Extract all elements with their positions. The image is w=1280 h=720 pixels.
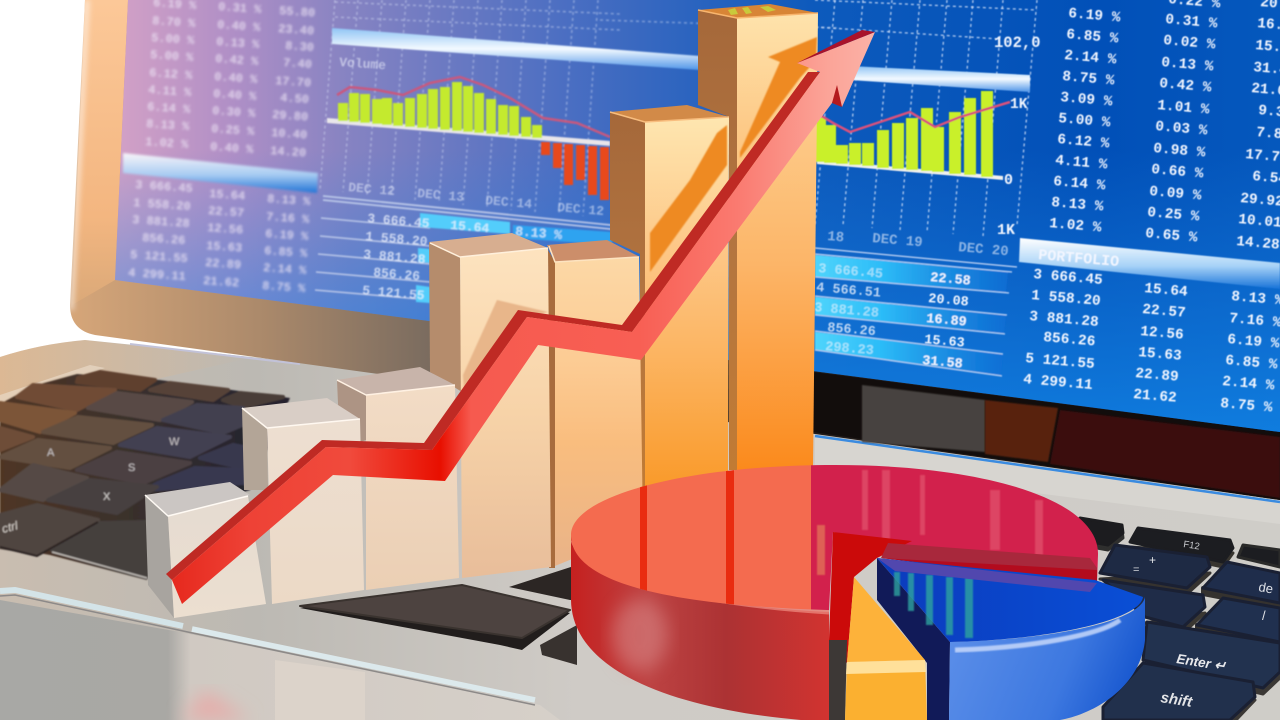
screen: blurred left data tables: 5.00 %	[151, 31, 196, 48]
screen: middle data table: 3 666.45	[818, 262, 883, 283]
screen: blurred left data tables: 4.11 %	[148, 83, 193, 100]
screen: blurred left data tables: 8.70 %	[152, 14, 197, 31]
bar 5	[547, 240, 643, 568]
screen: blurred left data tables	[123, 0, 318, 296]
key F12	[1130, 528, 1233, 567]
screen: right percent table: 5.00 %	[1058, 111, 1111, 132]
screen: blurred left data tables: 0.13 %	[216, 35, 261, 52]
screen: blurred left data tables: 22.57	[208, 204, 245, 221]
screen: blurred left data tables: 1 558.20	[133, 196, 191, 214]
key F12: F12	[1183, 539, 1200, 553]
screen: middle data table: 15.63	[924, 333, 965, 352]
trackpad	[0, 590, 560, 720]
screen: right percent table: 6.19 %	[1068, 6, 1121, 27]
screen: volume chart, left part: 5 121.55	[362, 283, 425, 303]
screen: portfolio table: 8.75 %	[1220, 396, 1273, 417]
laptop lid bezel	[70, 0, 1280, 500]
screen: blurred left data tables: 7.16 %	[266, 210, 311, 227]
screen: blurred left data tables: 0.31 %	[218, 0, 263, 17]
left keyboard keys: A	[47, 447, 55, 459]
key F11	[1080, 518, 1123, 550]
lower keyboard keys under bars	[300, 565, 577, 665]
screen: blurred left data tables: 8.13 %	[267, 192, 312, 209]
left keyboard keys: S	[128, 462, 135, 474]
bar chart: seven ascending 3D bars	[145, 4, 818, 618]
screen: middle data table: 856.26	[827, 321, 876, 340]
screen: volume chart, right part: 18	[827, 229, 845, 246]
screen: right percent table: 0.65 %	[1145, 226, 1198, 247]
left keyboard keys	[0, 372, 290, 580]
screen: portfolio table: 5 121.55	[1025, 351, 1095, 373]
screen: blurred left data tables: 6.19 %	[265, 227, 310, 244]
screen: blurred left data tables: 5 121.55	[130, 248, 188, 266]
screen: volume chart, right part: 1K	[997, 222, 1015, 239]
screen: volume chart, right part: 0	[1004, 172, 1013, 189]
screen: volume chart, left part: 15.64	[450, 218, 490, 236]
screen: blurred left data tables: 8.13 %	[146, 117, 191, 134]
screen: blurred left data tables: 15.63	[206, 239, 243, 256]
screen: blurred left data tables: 2.14 %	[263, 261, 308, 278]
inner red wall	[829, 532, 912, 663]
screen: volume chart, left part: 1 558.20	[365, 229, 428, 249]
screen: right percent table: 8.13 %	[1051, 195, 1104, 216]
screen: blurred left data tables: 856.26	[142, 231, 186, 248]
key delete	[1203, 562, 1280, 609]
screen: portfolio table: 15.64	[1144, 281, 1189, 301]
screen: blurred left data tables: 8.75 %	[262, 279, 307, 296]
screen: blurred left data tables: 3 666.45	[135, 178, 193, 196]
bar 7	[698, 4, 818, 470]
screen: volume chart, left part: 8.13 %	[515, 224, 563, 243]
screen: right percent table: 3.09 %	[1060, 90, 1113, 111]
key plus	[1100, 545, 1210, 594]
screen: right percent table: 0.66 %	[1151, 162, 1204, 183]
screen: volume chart, right part	[814, 0, 1041, 260]
screen: volume chart, left part: 856.26	[373, 265, 421, 284]
dark gap	[829, 640, 847, 720]
screen: portfolio table: 2.14 %	[1222, 374, 1275, 395]
screen: blurred left data tables: 4 299.11	[128, 266, 186, 284]
screen: portfolio table: 12.56	[1140, 324, 1184, 344]
screen: middle data table: 20.08	[928, 292, 969, 311]
screen: volume chart, left part	[315, 0, 840, 303]
screen: blurred left data tables: 0.30 %	[212, 104, 257, 121]
screen: blurred left data tables: 22.89	[205, 256, 242, 273]
screen: portfolio table: 21.62	[1133, 387, 1177, 407]
screen: right percent table: 4.11 %	[1055, 153, 1108, 174]
screen: right percent table: 0.42 %	[1159, 76, 1212, 97]
left keyboard keys: X	[103, 491, 111, 503]
screen: middle data table: 31.58	[922, 354, 963, 373]
screen: blurred left data tables: 10.40	[271, 126, 308, 143]
screen: portfolio table: 22.89	[1135, 366, 1179, 386]
screen: blurred left data tables: 0.42 %	[215, 52, 260, 69]
screen: blurred left data tables: 1.02 %	[145, 135, 190, 152]
screen: volume chart, left part: 3 881.28	[363, 247, 426, 267]
screen: blurred left data tables: 0.40 %	[210, 140, 255, 157]
right keyboard keys	[1080, 518, 1280, 720]
screen: right percent table: 0.31 %	[1165, 12, 1218, 33]
screen: portfolio table: 1 558.20	[1031, 288, 1101, 310]
screen: blurred left data tables: 8.30	[285, 39, 314, 55]
screen: blurred left data tables: 0.25 %	[211, 122, 256, 139]
key plus: +	[1149, 553, 1156, 567]
screen: right percent table: 0.02 %	[1163, 33, 1216, 54]
laptop deck	[0, 340, 1280, 720]
key shift	[1103, 663, 1255, 720]
blue slice	[877, 558, 1145, 720]
screen: middle data table: 298.23	[825, 340, 874, 359]
screen: right percent table: 0.13 %	[1161, 55, 1214, 76]
screen: blurred left data tables: 29.80	[272, 108, 309, 125]
left keyboard keys: ctrl	[0, 518, 20, 536]
screen: right percent table: 6.12 %	[1057, 132, 1110, 153]
key plus: =	[1133, 564, 1139, 576]
red slice body	[571, 533, 829, 720]
key enter: Enter ↵	[1176, 651, 1228, 674]
screen: middle data table: 4 566.51	[816, 281, 881, 302]
screen: blurred left data tables: 23.40	[278, 22, 315, 39]
screen: blurred left data tables: 0.40 %	[217, 18, 262, 35]
screen: blurred left data tables: 0.40 %	[213, 87, 258, 104]
screen: blurred left data tables: 21.62	[203, 274, 240, 291]
screen: portfolio table: 4 299.11	[1023, 372, 1094, 394]
screen: middle data table: 16.89	[926, 312, 967, 331]
screen: volume chart, left part: DEC 14	[485, 193, 533, 212]
screen: portfolio table: PORTFOLIO	[1038, 247, 1120, 271]
screen: volume chart, left part: Volume	[339, 55, 387, 73]
screen: blurred left data tables: 14.20	[270, 144, 307, 161]
screen: portfolio table: 6.85 %	[1225, 353, 1278, 374]
bar 3	[337, 367, 459, 590]
screen: right percent table: 1.02 %	[1049, 216, 1102, 237]
key enter	[1143, 622, 1280, 694]
screen: portfolio table: 3 666.45	[1033, 267, 1103, 289]
key slash: /	[1262, 608, 1266, 623]
screen: volume chart, left part: DEC 12	[348, 180, 396, 199]
bar 4	[429, 233, 551, 578]
screen: blurred left data tables: 17.70	[275, 74, 312, 91]
screen: blurred left data tables: 0.40 %	[214, 70, 259, 87]
red strip	[881, 543, 1097, 584]
screen: blurred left data tables: 4.50	[280, 91, 309, 107]
screen: blurred left data tables: 5.00 %	[150, 48, 195, 65]
laptop screen	[100, 0, 1280, 440]
screen: right percent table	[1049, 0, 1280, 254]
bar 2	[242, 398, 364, 604]
left keyboard keys: W	[169, 436, 180, 448]
screen: volume chart, left part: DEC 13	[417, 186, 465, 205]
screen: portfolio table: 3 881.28	[1029, 309, 1099, 331]
screen: middle data table: 3 881.28	[814, 301, 879, 322]
screen: blurred left data tables: 6.85 %	[264, 244, 309, 261]
screen: right percent table: 0.03 %	[1155, 119, 1208, 140]
screen: right percent table: 0.09 %	[1149, 184, 1202, 205]
bar 6	[610, 105, 729, 500]
key shift: shift	[1159, 689, 1194, 711]
screen: blurred left data tables: 3 881.28	[132, 213, 190, 231]
screen: middle data table: 22.58	[930, 271, 971, 290]
screen: portfolio table: 15.63	[1138, 345, 1182, 365]
screen: right percent table: 6.85 %	[1066, 27, 1119, 48]
red slice top	[571, 465, 1098, 610]
screen: blurred left data tables: 15.64	[209, 187, 246, 204]
screen: right percent table: 14.28	[1236, 234, 1280, 254]
bar 1	[145, 482, 266, 618]
key slash	[1197, 598, 1280, 647]
screen: volume chart, right part: 102,0	[994, 34, 1041, 52]
screen: volume chart, right part: DEC 19	[872, 231, 923, 251]
screen: portfolio table	[1019, 238, 1280, 417]
growth arrow	[166, 30, 875, 604]
screen: right percent table: 0.98 %	[1153, 141, 1206, 162]
screen: middle data table	[814, 248, 1017, 376]
screen: right percent table: 8.75 %	[1062, 69, 1115, 90]
screen: volume chart, left part: DEC 12	[557, 200, 605, 219]
pie chart	[560, 460, 1145, 720]
screen: blurred left data tables: 12.56	[207, 221, 244, 238]
screen: right percent table: 1.01 %	[1157, 98, 1210, 119]
screen: blurred left data tables: 55.80	[279, 4, 316, 21]
screen: right percent table: 6.14 %	[1053, 174, 1106, 195]
screen: volume chart, right part: DEC 20	[958, 240, 1009, 260]
key question	[1103, 580, 1205, 633]
screen: portfolio table: 6.19 %	[1227, 332, 1280, 353]
screen: portfolio table: 22.57	[1142, 302, 1186, 322]
screen: portfolio table: 856.26	[1043, 330, 1096, 351]
screen: volume chart, left part: 3 666.45	[367, 211, 430, 231]
screen: blurred left data tables: 7.40	[283, 56, 312, 72]
screen: blurred left data tables: 6.12 %	[149, 66, 194, 83]
screen: right percent table: 2.14 %	[1064, 48, 1117, 69]
screen: blurred left data tables: 6.14 %	[147, 100, 192, 117]
screen: right percent table: 0.25 %	[1147, 205, 1200, 226]
yellow slice	[845, 577, 927, 720]
screen: volume chart, right part: 1K	[1010, 97, 1028, 113]
key delete: de	[1257, 579, 1274, 596]
